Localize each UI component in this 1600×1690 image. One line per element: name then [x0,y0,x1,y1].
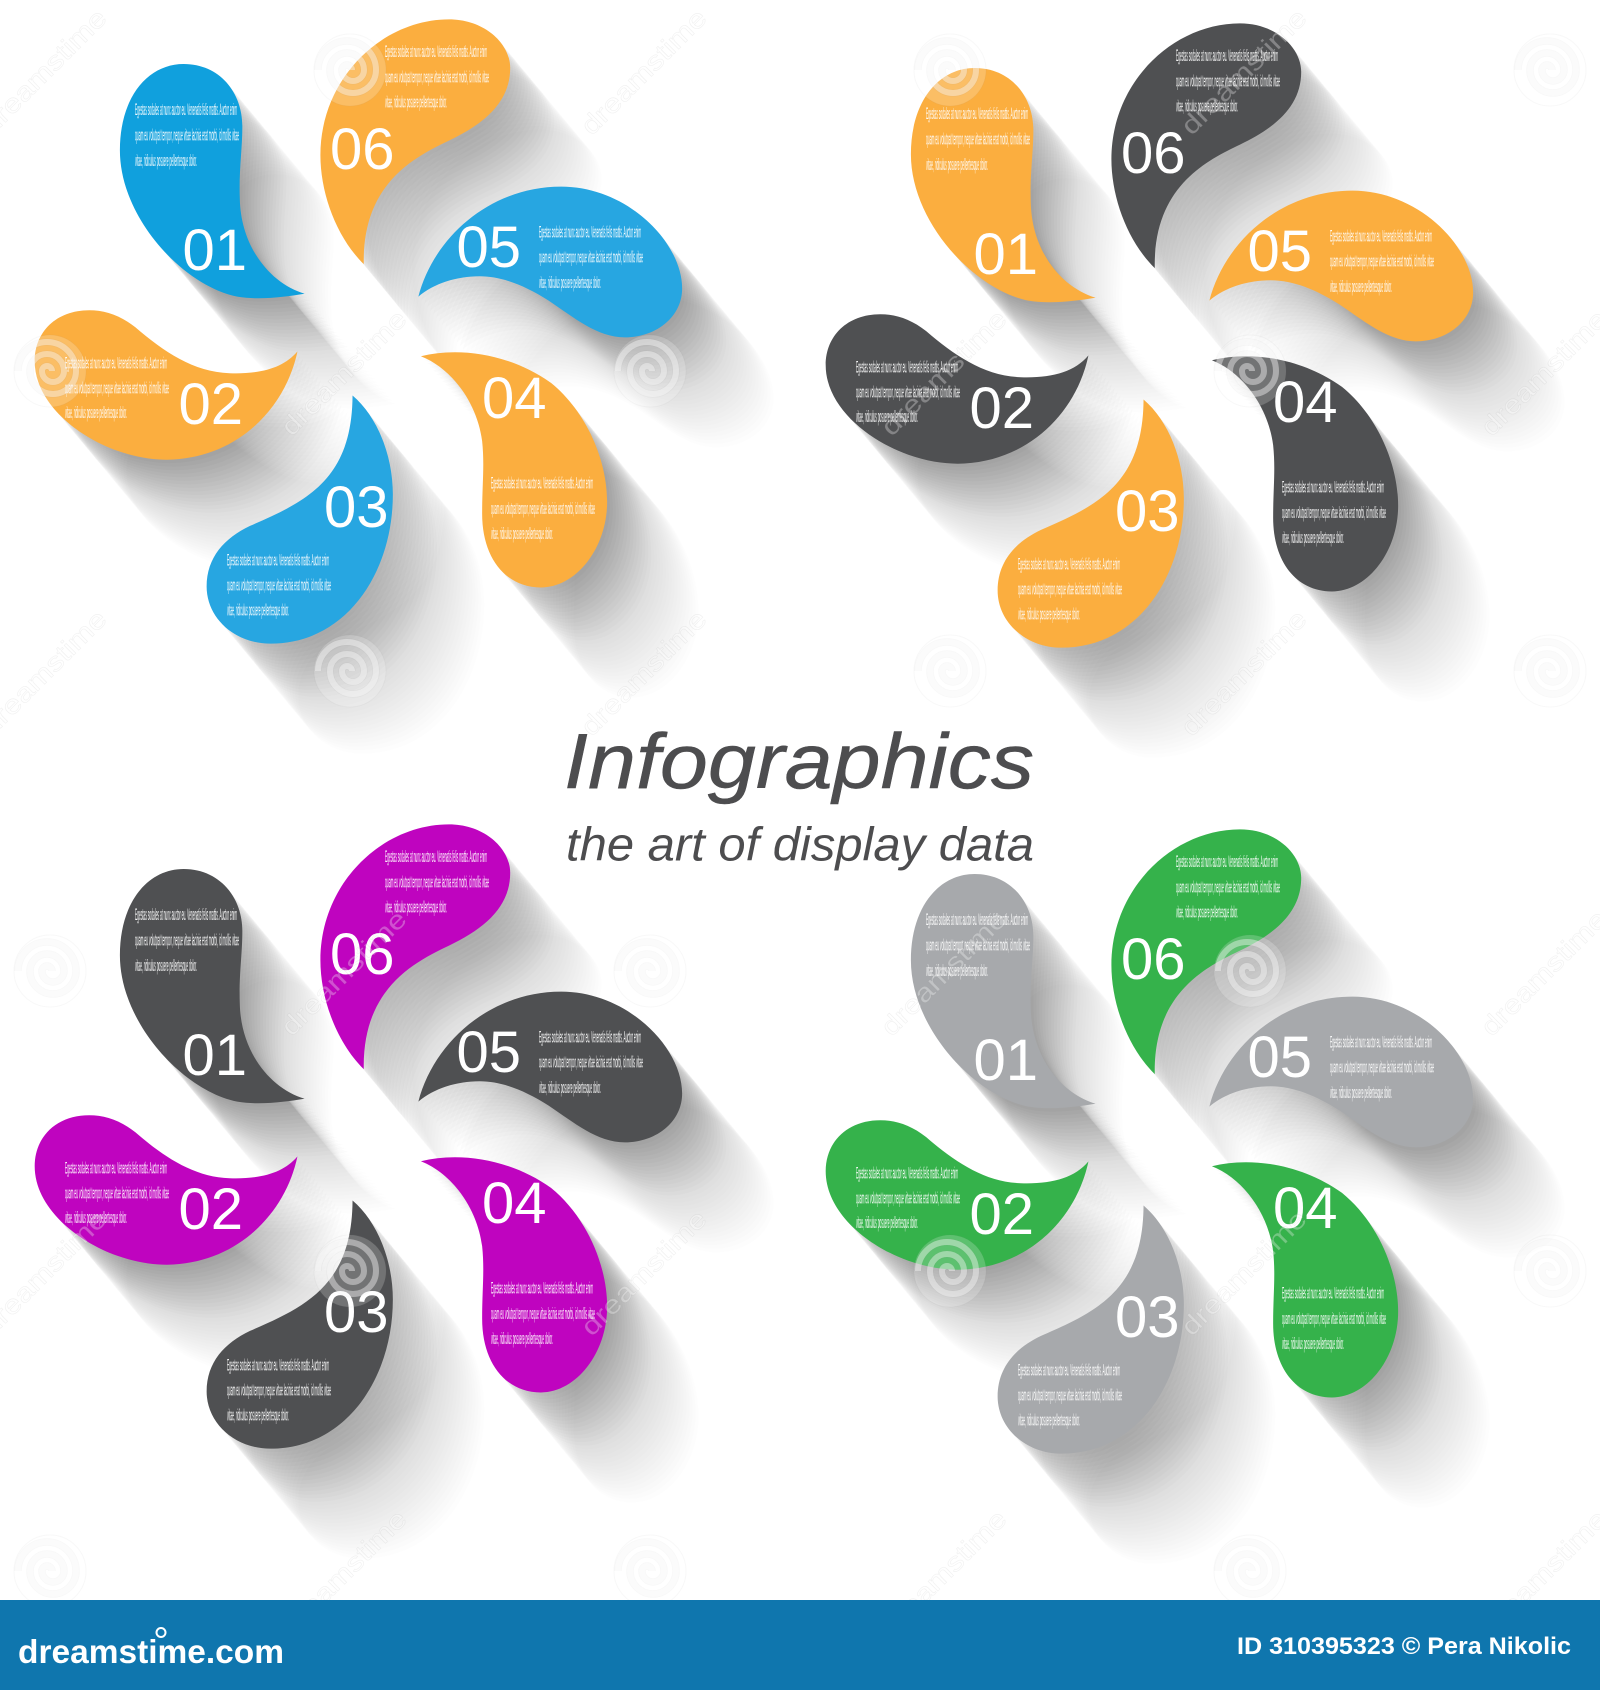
petal 01: 01 [182,218,247,283]
petal 01: 01 [182,1023,247,1088]
petal 06 [320,19,510,264]
petal 05 [418,992,682,1142]
petal 02: 02 [970,1182,1034,1247]
petal 03 [998,400,1184,648]
petal 04: 04 [482,366,547,431]
petal 02 [826,314,1088,464]
cluster: bottom left dark grey and magenta: Egestas sodales at nunc auctor eu. Venenatis felis mattis. Auctor enim [65,1158,167,1177]
petal 05 [1209,191,1473,341]
cluster: bottom right light grey and green: quam eu volutpat tempor, neque vitae lacinia erat morbi, id mollis vitae [1018,1385,1122,1404]
watermark wordmarks: dreamstime [875,304,1013,442]
cluster: top left blue and orange: Egestas sodales at nunc auctor eu. Venenatis felis mattis. Auctor enim [385,42,487,61]
text: Egestas sodales at nunc auctor eu. Venenatis felis mattis. Auctor enim [539,1028,641,1046]
cluster: bottom right light grey and green [826,829,1565,1564]
cluster: top left blue and orange: quam eu volutpat tempor, neque vitae lacinia erat morbi, id mollis vitae [135,126,239,145]
cluster: top left blue and orange: Egestas sodales at nunc auctor eu. Venenatis felis mattis. Auctor enim [65,353,167,372]
cluster: bottom left dark grey and magenta: quam eu volutpat tempor, neque vitae lacinia erat morbi, id mollis vitae [227,1380,331,1399]
petal 01: vitae, ridiculus posuere pellentesque dolor. [135,956,197,975]
watermark wordmarks: dreamstime [875,1504,1013,1642]
petal 04: 04 [1273,370,1338,435]
watermark wordmarks: dreamstime [1475,904,1600,1042]
cluster: bottom left dark grey and magenta: Egestas sodales at nunc auctor eu. Venenatis felis mattis. Auctor enim [135,905,237,924]
cluster: bottom left dark grey and magenta: quam eu volutpat tempor, neque vitae lacinia erat morbi, id mollis vitae [135,931,239,950]
cluster: bottom left dark grey and magenta [35,824,774,1559]
watermark wordmarks: dreamstime [275,1504,413,1642]
footer logo: dreamstime.com [18,1633,284,1670]
cluster: top left blue and orange: quam eu volutpat tempor, neque vitae lacinia erat morbi, id mollis vitae [491,499,595,518]
watermark wordmarks: dreamstime [1475,1504,1600,1642]
cluster: top left blue and orange: Egestas sodales at nunc auctor eu. Venenatis felis mattis. Auctor enim [491,474,593,493]
petal 03: vitae, ridiculus posuere pellentesque dolor. [1018,605,1080,624]
watermark wordmarks: dreamstime [575,1204,713,1342]
petal 04 [1212,1162,1398,1397]
petal 01 [911,874,1096,1108]
petal 03: vitae, ridiculus posuere pellentesque dolor. [227,1406,289,1425]
cluster: top left blue and orange: vitae, ridiculus posuere pellentesque dolor. [491,524,553,543]
cluster: top left blue and orange: vitae, ridiculus posuere pellentesque dolor. [539,273,601,292]
watermark wordmarks: dreamstime [1175,1204,1313,1342]
petal 01: 01 [974,222,1038,287]
cluster: top right orange and dark grey: Egestas sodales at nunc auctor eu. Venenatis felis mattis. Auctor enim [1018,555,1120,574]
cluster: bottom right light grey and green: quam eu volutpat tempor, neque vitae lacinia erat morbi, id mollis vitae [856,1189,960,1208]
cluster: top right orange and dark grey: quam eu volutpat tempor, neque vitae lacinia erat morbi, id mollis vitae [1018,579,1122,598]
petal 01 [120,869,305,1103]
petal 03: 03 [324,475,389,540]
watermark wordmarks: dreamstime [275,304,413,442]
footer bar [0,1600,1600,1690]
petal 03: 03 [1115,479,1180,544]
petal 05 [1209,997,1473,1147]
petal 03 [207,396,393,644]
petal 06: 06 [1121,927,1186,992]
petal 06: 06 [1121,121,1186,186]
watermark wordmarks: dreamstime [1175,604,1313,742]
petal 04: 04 [482,1171,547,1236]
cluster: top left blue and orange: quam eu volutpat tempor, neque vitae lacinia erat morbi, id mollis vitae [227,575,331,594]
cluster: top left blue and orange: Egestas sodales at nunc auctor eu. Venenatis felis mattis. Auctor enim [227,551,329,570]
subtitle: the art of display data [566,818,1034,870]
cluster: top right orange and dark grey: vitae, ridiculus posuere pellentesque dolor. [1282,528,1344,547]
long shadow [826,829,1565,1564]
cluster: bottom right light grey and green: Egestas sodales at nunc auctor eu. Venenatis felis mattis. Auctor enim [926,910,1028,929]
petal 02: vitae, ridiculus posuere pellentesque dolor. [65,403,127,422]
petal 01: 01 [974,1028,1038,1093]
long shadow [35,824,774,1559]
cluster: bottom left dark grey and magenta: quam eu volutpat tempor, neque vitae lacinia erat morbi, id mollis vitae [65,1184,169,1203]
cluster: top left blue and orange: vitae, ridiculus posuere pellentesque dolor. [385,93,447,112]
petal 05 [418,187,682,337]
petal 02 [35,310,297,460]
petal 06 [1111,829,1301,1074]
petal 05: 05 [456,215,521,280]
watermark wordmarks: dreamstime [275,904,413,1042]
petal 06: 06 [330,117,395,182]
cluster: top left blue and orange: Egestas sodales at nunc auctor eu. Venenatis felis mattis. Auctor enim [135,100,237,119]
long shadow [826,23,1565,758]
cluster: bottom right light grey and green: quam eu volutpat tempor, neque vitae lacinia erat morbi, id mollis vitae [926,936,1030,955]
cluster: bottom left dark grey and magenta: Egestas sodales at nunc auctor eu. Venenatis felis mattis. Auctor enim [491,1279,593,1298]
petal 06 [320,824,510,1069]
cluster: top right orange and dark grey: quam eu volutpat tempor, neque vitae lacinia erat morbi, id mollis vitae [926,130,1030,149]
petal 04 [421,1157,607,1392]
title: Infographics [564,717,1034,805]
cluster: top right orange and dark grey: Egestas sodales at nunc auctor eu. Venenatis felis mattis. Auctor enim [926,104,1028,123]
petal 02: 02 [178,1177,243,1242]
cluster: bottom left dark grey and magenta: Egestas sodales at nunc auctor eu. Venenatis felis mattis. Auctor enim [227,1356,329,1375]
petal 02 [826,1120,1088,1270]
footer credit: ID 310395323 © Pera Nikolic [1237,1633,1571,1660]
petal 01 [120,64,305,298]
petal 05: 05 [1248,219,1312,284]
petal 04: 04 [1273,1176,1338,1241]
petal 01: vitae, ridiculus posuere pellentesque dolor. [926,155,988,174]
petal 03: vitae, ridiculus posuere pellentesque dolor. [227,601,289,620]
cluster: bottom right light grey and green: vitae, ridiculus posuere pellentesque dolor. [1176,903,1238,922]
cluster: bottom right light grey and green: Egestas sodales at nunc auctor eu. Venenatis felis mattis. Auctor enim [856,1163,958,1182]
long shadow [35,19,774,754]
text: quam eu volutpat tempor, neque vitae lacinia erat morbi, id mollis vitae [539,248,643,267]
watermark wordmarks: dreamstime [1175,3,1313,141]
cluster: top right orange and dark grey: Egestas sodales at nunc auctor eu. Venenatis felis mattis. Auctor enim [856,357,958,376]
watermark wordmarks: dreamstime [575,3,713,141]
petal 01 [911,68,1096,302]
petal 03: vitae, ridiculus posuere pellentesque dolor. [1018,1411,1080,1430]
cluster: bottom left dark grey and magenta: quam eu volutpat tempor, neque vitae lacinia erat morbi, id mollis vitae [491,1304,595,1323]
text: Egestas sodales at nunc auctor eu. Venenatis felis mattis. Auctor enim [539,222,641,242]
cluster: bottom left dark grey and magenta: quam eu volutpat tempor, neque vitae lacinia erat morbi, id mollis vitae [385,872,489,891]
petal 05: 05 [1248,1025,1312,1090]
petal 01: vitae, ridiculus posuere pellentesque dolor. [135,151,197,170]
petal 02: vitae, ridiculus posuere pellentesque dolor. [856,1213,918,1232]
watermark wordmarks: dreamstime [1475,304,1600,442]
watermark wordmarks: dreamstime [875,904,1013,1042]
cluster: bottom left dark grey and magenta: vitae, ridiculus posuere pellentesque dolor. [491,1329,553,1348]
petal 06: 06 [330,922,395,987]
cluster: top left blue and orange: quam eu volutpat tempor, neque vitae lacinia erat morbi, id mollis vitae [65,379,169,398]
petal 02: 02 [970,376,1034,441]
petal 02: vitae, ridiculus posuere pellentesque dolor. [856,407,918,426]
cluster: bottom left dark grey and magenta: vitae, ridiculus posuere pellentesque dolor. [385,898,447,917]
petal 01: vitae, ridiculus posuere pellentesque dolor. [926,961,988,980]
cluster: top right orange and dark grey: vitae, ridiculus posuere pellentesque dolor. [1176,97,1238,116]
petal 04 [1212,356,1398,591]
cluster: bottom right light grey and green: Egestas sodales at nunc auctor eu. Venenatis felis mattis. Auctor enim [1018,1361,1120,1380]
petal 03: 03 [1115,1285,1180,1350]
petal 02 [35,1115,297,1265]
petal 03 [207,1201,393,1449]
petal 02: vitae, ridiculus posuere pellentesque dolor. [65,1208,127,1227]
cluster: bottom left dark grey and magenta: vitae, ridiculus posuere pellentesque dolor. [539,1078,601,1097]
cluster: top right orange and dark grey: quam eu volutpat tempor, neque vitae lacinia erat morbi, id mollis vitae [856,383,960,402]
cluster: top left blue and orange: quam eu volutpat tempor, neque vitae lacinia erat morbi, id mollis vitae [385,67,489,86]
cluster: top right orange and dark grey [826,23,1565,758]
cluster: top left blue and orange [35,19,774,754]
petal 03 [998,1206,1184,1454]
text: quam eu volutpat tempor, neque vitae lacinia erat morbi, id mollis vitae [539,1053,643,1072]
watermark wordmarks: dreamstime [575,604,713,742]
cluster: bottom left dark grey and magenta: Egestas sodales at nunc auctor eu. Venenatis felis mattis. Auctor enim [385,847,487,866]
cluster: bottom right light grey and green: vitae, ridiculus posuere pellentesque dolor. [1282,1334,1344,1353]
petal 04 [421,352,607,587]
petal 05: 05 [456,1020,521,1085]
petal 03: 03 [324,1280,389,1345]
petal 06 [1111,23,1301,268]
petal 02: 02 [178,372,243,437]
